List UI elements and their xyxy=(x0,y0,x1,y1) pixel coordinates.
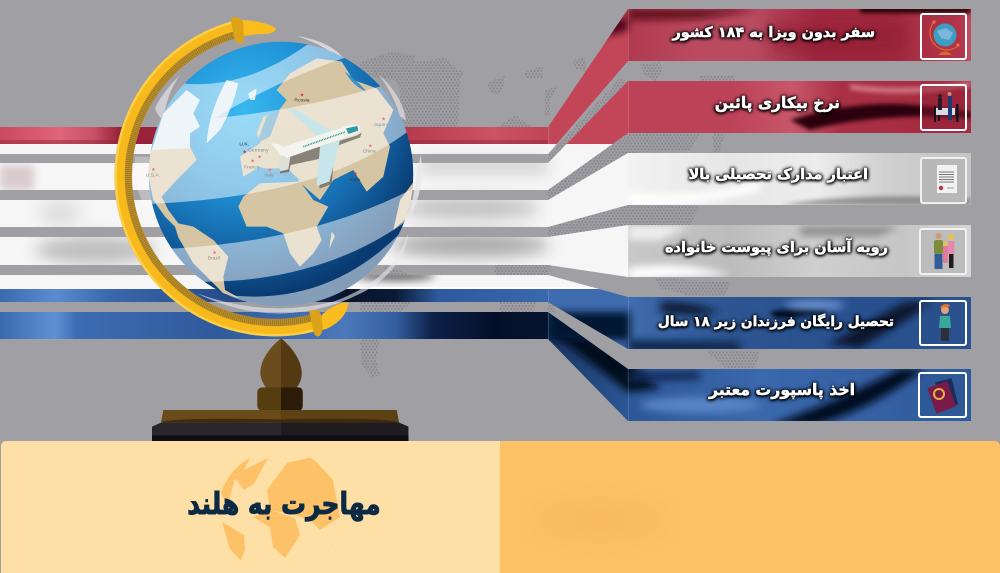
stand stem xyxy=(260,338,302,388)
ice caps xyxy=(152,80,257,150)
globe sphere xyxy=(148,42,414,306)
map labels: Italy xyxy=(264,173,274,179)
text: passport: اخذ پاسپورت معتبر xyxy=(709,380,855,399)
map labels: U.S.A. xyxy=(146,173,160,179)
arc top end xyxy=(231,17,276,43)
panel: title left xyxy=(1,441,500,573)
title: مهاجرت به هلند xyxy=(187,487,381,522)
icon: globe xyxy=(921,14,966,59)
fabric folds: white xyxy=(0,160,971,289)
fold seams xyxy=(548,120,549,345)
inland seas xyxy=(257,72,367,180)
yellow meridian arc xyxy=(116,22,316,335)
map star markers: ★ xyxy=(242,149,247,155)
airplane wings xyxy=(287,108,340,139)
map labels: China xyxy=(363,148,376,154)
icon: world map xyxy=(221,458,340,560)
map star markers: ★ xyxy=(381,117,386,123)
airplane tail xyxy=(271,143,292,156)
text: degree validity: اعتبار مدارک تحصیلی بالا xyxy=(688,167,868,183)
map labels: Russia xyxy=(294,98,310,104)
airplane cockpit xyxy=(346,126,358,134)
glass back rings xyxy=(135,36,422,217)
icon: family xyxy=(920,229,966,274)
translucent white stripes xyxy=(148,44,412,306)
text: free education: تحصیل رایگان فرزندان زیر ۱۸ سال xyxy=(658,314,894,330)
globe xyxy=(116,17,433,337)
map star markers: ★ xyxy=(257,155,262,161)
icon: passport xyxy=(919,373,966,417)
map labels: Germany xyxy=(248,148,269,154)
text: low unemployment: نرخ بیکاری پائین xyxy=(715,94,840,112)
panel: right block xyxy=(500,441,1000,573)
dotted world map xyxy=(360,52,760,378)
map star markers: ★ xyxy=(151,167,156,173)
flag ribbons xyxy=(0,0,1000,429)
white stripe xyxy=(0,144,1000,289)
map star markers: ★ xyxy=(250,159,255,165)
map labels: Japan xyxy=(373,122,387,128)
airplane fuselage xyxy=(277,125,360,158)
globe stand xyxy=(152,338,408,443)
map star markers: ★ xyxy=(268,167,273,173)
airplane shadow xyxy=(280,133,362,189)
map labels xyxy=(146,98,387,261)
map labels: India xyxy=(349,177,360,183)
stand collar xyxy=(257,387,303,411)
map star markers: ★ xyxy=(353,171,358,177)
glass front rim xyxy=(197,233,408,313)
map star markers xyxy=(151,93,386,256)
stand lower base xyxy=(152,423,408,443)
map star markers: ★ xyxy=(212,250,217,256)
blue stripe xyxy=(0,289,971,429)
map star markers: ★ xyxy=(368,143,373,149)
map labels: U.K. xyxy=(239,142,249,148)
arc bottom end xyxy=(309,303,348,337)
text: family reunion: رویه آسان برای پیوست خانواده xyxy=(665,240,888,256)
continents xyxy=(148,58,415,298)
red stripe xyxy=(0,0,971,144)
icon: student xyxy=(920,301,966,345)
stand upper base xyxy=(161,410,399,423)
icon: document xyxy=(921,158,966,203)
ocean xyxy=(149,42,413,306)
fabric folds: red xyxy=(600,7,971,130)
map star markers: ★ xyxy=(300,93,305,99)
text: visa-free travel: سفر بدون ویزا به ۱۸۴ کشور xyxy=(672,25,875,41)
map labels: France xyxy=(244,165,260,171)
icon: meeting xyxy=(921,85,966,130)
airplane xyxy=(271,108,362,189)
fabric folds: blue xyxy=(548,300,935,425)
map labels: Brazil xyxy=(208,255,220,261)
